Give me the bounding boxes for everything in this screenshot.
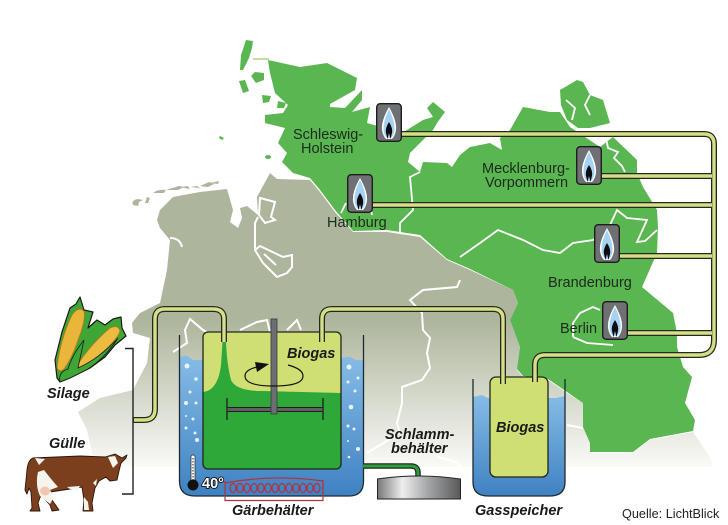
sludge pipe <box>363 466 418 478</box>
pipe stubs <box>503 377 535 384</box>
source credit: Quelle: LichtBlick <box>622 507 720 521</box>
label: Biogas: Biogas <box>496 420 544 436</box>
label: Gülle: Gülle <box>49 436 85 452</box>
label: Schleswig-Holstein: Holstein <box>301 141 353 157</box>
icon: gas burner Mecklenburg-Vorpommern <box>577 147 601 184</box>
icon: corn silage <box>55 297 126 382</box>
icon: gas burner Schleswig-Holstein <box>377 104 401 141</box>
silage inlet pipe <box>133 309 224 420</box>
tank outer wall <box>180 335 364 496</box>
rotation arrow <box>245 365 303 386</box>
label: Schlammbehälter: behälter <box>391 441 449 457</box>
label: Schlammbehälter: Schlamm- <box>385 427 454 443</box>
label: Berlin: Berlin <box>560 321 597 337</box>
fermenter tank: Gärbehälter <box>133 309 364 500</box>
label: Brandenburg: Brandenburg <box>548 275 632 291</box>
map: grey western Germany <box>78 173 713 467</box>
label: Schleswig-Holstein: Schleswig- <box>293 127 363 143</box>
thermometer <box>188 455 198 490</box>
tank water jacket <box>180 356 363 496</box>
biogas transfer pipe <box>322 309 503 384</box>
label: Gasspeicher: Gasspeicher <box>475 503 563 519</box>
liquid substrate <box>204 342 341 469</box>
label: Mecklenburg-Vorpommern: Vorpommern <box>485 175 568 191</box>
map: green northeastern Germany <box>219 40 695 452</box>
heating coil <box>225 478 323 500</box>
icon: cow <box>25 454 127 511</box>
label: Biogas: Biogas <box>287 346 335 362</box>
label: Gärbehälter: Gärbehälter <box>232 503 315 519</box>
temperature 40°: 40° <box>202 476 224 492</box>
air bubbles <box>184 364 360 458</box>
inner digester <box>203 332 341 469</box>
bracket <box>122 348 133 494</box>
gas storage tank: Gasspeicher <box>473 375 565 496</box>
icon: gas burner Hamburg <box>348 175 372 212</box>
tank water <box>473 395 565 496</box>
stirrer shaft <box>271 319 277 414</box>
sludge tank <box>378 476 460 499</box>
label: Hamburg: Hamburg <box>327 215 387 231</box>
icon: gas burner Berlin <box>603 302 627 339</box>
label: Silage: Silage <box>47 386 90 402</box>
gas bell <box>490 377 548 477</box>
tank wall <box>473 379 565 496</box>
icon: gas burner Brandenburg <box>595 225 619 262</box>
pipes: gas distribution network <box>372 134 714 382</box>
label: Mecklenburg-Vorpommern: Mecklenburg- <box>482 161 570 177</box>
stirrer blade <box>227 398 323 420</box>
